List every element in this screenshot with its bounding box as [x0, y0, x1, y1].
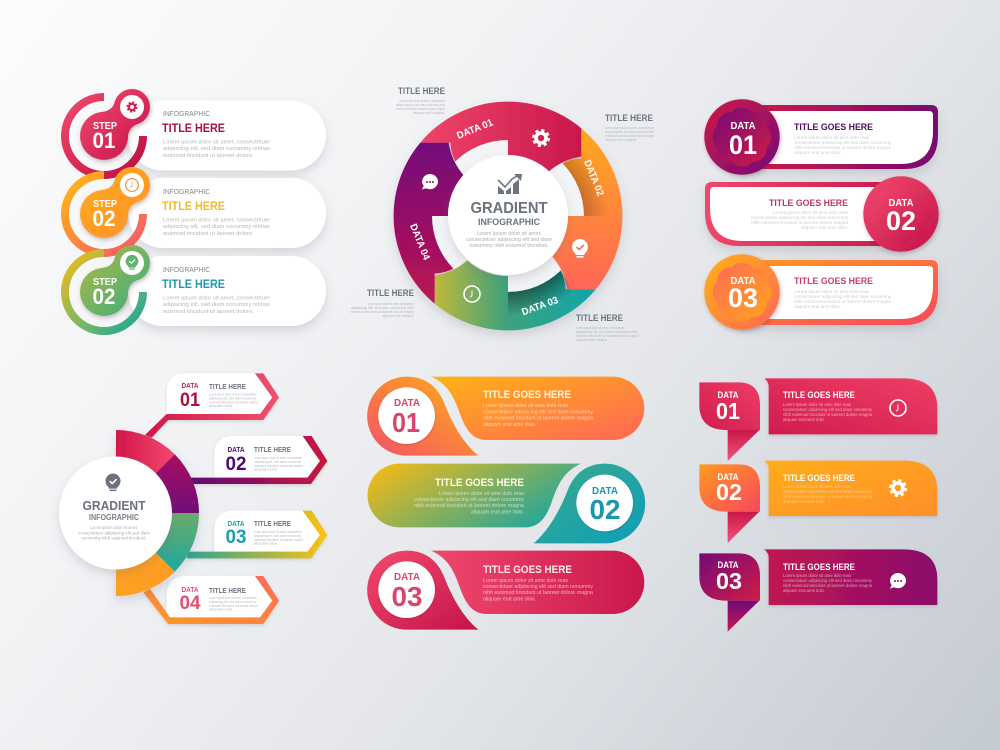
banner 2 text: nibh euismod tincidunt ut laoreet dolore magna	[414, 503, 525, 509]
banner 3 text: TITLE GOES HERE	[483, 564, 572, 576]
banner 2 teardrop	[534, 464, 645, 543]
segment labels: DATA 01	[455, 117, 495, 142]
callout top right: Lorem ipsum dolor sit amet, consectetuer	[605, 126, 655, 130]
step 2 row	[65, 167, 326, 253]
card 1 text: consectetuer adipiscing elit sed diam nonummy	[783, 407, 873, 412]
card 2	[764, 461, 937, 516]
card 2 text: euismod tincidunt ut laoreet dolore	[254, 464, 303, 468]
callout bottom right: aliquam erat volutpat.	[576, 338, 608, 342]
text 1: consectetuer adipiscing elit sed diam nonummy	[794, 140, 892, 145]
inner white 2	[710, 187, 900, 241]
card 3	[764, 549, 937, 605]
card 4 text: 04	[180, 593, 201, 614]
callout top left: Lorem ipsum dolor sit amet, consectetuer	[399, 99, 446, 103]
banner 3 text: Lorem ipsum dolor sit ame dolo reas	[483, 578, 568, 584]
card 3 text: aliquam erat.	[254, 542, 278, 546]
flower 3	[713, 263, 771, 321]
callout bottom left: aliquam erat volutpat.	[382, 314, 414, 318]
donut segments	[394, 102, 622, 330]
step 2 text: euismod tincidunt ut laoreet dolore.	[163, 231, 254, 237]
callout bottom right	[576, 313, 639, 342]
icon: chat	[890, 573, 906, 589]
ring 2	[65, 175, 143, 253]
centre heading	[466, 200, 552, 249]
frame 1	[740, 105, 938, 169]
card 1 text: aliquam erat.	[209, 404, 233, 408]
card 2 text: aliquam erat.	[254, 468, 278, 472]
white pill 1	[128, 100, 326, 170]
banner 2 text: Lorem ipsum dolor sit ame dolo reas	[439, 491, 524, 497]
label 2: DATA	[888, 198, 914, 209]
card 3 text: 03	[226, 527, 246, 548]
flower 1	[713, 108, 771, 166]
centre heading: INFOGRAPHIC	[478, 217, 540, 228]
callout top left: aliquam erat volutpat.	[413, 111, 445, 115]
icon: clock	[120, 173, 144, 197]
step 2 label: STEP	[93, 199, 117, 210]
card 3 text: DATA	[228, 521, 244, 528]
callout top right: aliquam erat volutpat.	[605, 138, 637, 142]
tag 3 number: DATA	[718, 560, 739, 570]
inner white 3	[740, 266, 933, 319]
centre white disc	[448, 155, 568, 275]
segment labels	[407, 117, 606, 318]
segment labels: DATA 02	[581, 158, 606, 198]
card 1 text: aliquam erat ame dolo.	[783, 417, 825, 422]
banner 2 number: DATA	[592, 486, 618, 497]
icon: clock	[464, 286, 480, 302]
step 3 text: INFOGRAPHIC	[163, 267, 210, 274]
card 3 text: consectetuer adipiscing elit sed diam nonummy	[783, 578, 873, 583]
card 3 text: nibh euismod tincidunt ut laoreet dolore magna	[783, 583, 872, 588]
banner 3 teardrop	[367, 551, 478, 630]
tag 2 number: 02	[716, 479, 742, 505]
banner 1 disc	[378, 387, 435, 444]
card 4 text: aliquam erat.	[209, 608, 233, 612]
card 4 text	[180, 587, 258, 614]
tag 3	[699, 553, 760, 632]
half ring wedges	[116, 430, 199, 596]
callout top left: TITLE HERE	[398, 86, 445, 96]
label 3: DATA	[730, 276, 756, 287]
callout top left: adipiscing elit, sed diam nonummy nibh	[396, 103, 445, 107]
card 3 text: euismod tincidunt ut laoreet dolore	[254, 538, 303, 542]
step 3 text: euismod tincidunt ut laoreet dolore.	[163, 309, 254, 315]
disc 1	[704, 99, 780, 175]
card 3 text: TITLE GOES HERE	[783, 562, 855, 572]
callout bottom right: TITLE HERE	[576, 313, 623, 323]
banner 1 teardrop	[367, 377, 478, 456]
callout bottom left: TITLE HERE	[367, 288, 414, 298]
frame 3	[740, 260, 938, 325]
banner 1 text	[483, 389, 594, 428]
step 3 label: 02	[92, 284, 116, 309]
text 3	[794, 276, 892, 309]
card 2 text	[783, 473, 873, 504]
card 2 text: Lorem ipsum dolor sit ame dolo reas	[783, 484, 852, 489]
banner 1 text: TITLE GOES HERE	[483, 389, 571, 401]
centre heading: nonummy nibh euismod tincidunt.	[470, 243, 548, 249]
text 2: TITLE GOES HERE	[769, 198, 848, 209]
card 1 text: nibh euismod tincidunt ut laoreet dolore magna	[783, 412, 872, 417]
centre text: INFOGRAPHIC	[89, 513, 139, 522]
card 1 text: adipiscing elit, sed diam nonummy	[209, 396, 256, 400]
banner 1 text: aliquam erat ame dolo.	[483, 422, 536, 428]
callout bottom left: euismod tincidunt ut laoreet dolore magna	[351, 310, 414, 314]
text 2	[751, 198, 849, 230]
banner 2 number: 02	[590, 494, 620, 525]
frame 2	[705, 182, 900, 246]
step 1 text: INFOGRAPHIC	[163, 111, 210, 118]
card 1 text: euismod tincidunt ut laoreet dolore	[209, 400, 258, 404]
step 1 text: adipiscing elit, sed diam nonummy nibhas	[163, 146, 270, 152]
disc 2	[863, 176, 939, 252]
blob 3	[80, 245, 150, 316]
centre heading: GRADIENT	[470, 200, 548, 217]
banner 2 text: aliquam erat ame dolo.	[471, 510, 524, 516]
icon: chat	[422, 174, 438, 190]
banner 2 disc	[576, 475, 633, 531]
card 1	[764, 378, 937, 434]
white pill 2	[128, 178, 326, 248]
card 3 text	[783, 562, 873, 593]
icon: clock	[890, 400, 906, 416]
text 2: aliquam erat ame dolo.	[801, 225, 848, 230]
panel: radial arrows	[59, 373, 327, 624]
segment labels: DATA 04	[407, 222, 432, 262]
tag 3 number: 03	[716, 568, 742, 594]
centre heading: consectetuer adipiscing elit sed diam	[466, 237, 552, 243]
callout bottom right: euismod tincidunt ut laoreet dolore magna	[576, 334, 639, 338]
card 4 text: Lorem ipsum dolor sit amet, consectetuer	[209, 596, 258, 600]
icon: bulb	[572, 239, 588, 258]
banner 1 text: consectetuer adipiscing elit sed diam nonummy	[483, 410, 593, 416]
card 4 text: euismod tincidunt ut laoreet dolore	[209, 604, 258, 608]
banner 2 text: TITLE GOES HERE	[435, 477, 524, 489]
step 1 text: TITLE HERE	[162, 121, 225, 135]
banner 3 number: DATA	[394, 572, 420, 583]
label 3: 03	[728, 283, 758, 313]
banner 3 disc	[378, 561, 435, 618]
card 2 text	[226, 447, 303, 475]
card 1 text: TITLE GOES HERE	[783, 390, 855, 400]
card 3 text: adipiscing elit, sed diam nonummy	[254, 534, 301, 538]
card 1 text: Lorem ipsum dolor sit ame dolo reas	[783, 402, 852, 407]
step 3 row	[65, 245, 326, 331]
card 2 text: consectetuer adipiscing elit sed diam nonummy	[783, 489, 873, 494]
card 3 text: TITLE HERE	[254, 521, 291, 528]
step 3 text: adipiscing elit, sed diam nonummy nibhas	[163, 302, 270, 308]
step 3 text: TITLE HERE	[162, 277, 225, 291]
callout bottom left: Lorem ipsum dolor sit amet, consectetuer	[368, 302, 415, 306]
text 2: consectetuer adipiscing elit sed diam nonummy	[751, 215, 849, 220]
step 1 text	[162, 111, 270, 159]
card 3 text: aliquam erat ame dolo.	[783, 588, 825, 593]
flower 2	[872, 185, 930, 243]
card 4 text: DATA	[182, 587, 198, 594]
badge card 3	[704, 254, 938, 330]
callout bottom right: adipiscing elit, sed diam nonummy nibh	[576, 330, 638, 334]
arrow cards	[143, 373, 327, 624]
centre text: nonummy nibh euismod tincidunt.	[82, 536, 146, 542]
callout top right	[605, 113, 655, 142]
icon: gear	[890, 480, 906, 496]
text 2: nibh euismod tincidunt ut laoreet dolore magna	[751, 220, 848, 225]
blob 1	[80, 89, 150, 160]
text 3: TITLE GOES HERE	[794, 276, 873, 287]
card 1 text	[180, 383, 258, 411]
panel: data badges	[704, 99, 939, 330]
card 2 text: aliquam erat ame dolo.	[783, 499, 825, 504]
callout bottom left	[351, 288, 415, 318]
banner 1 number: DATA	[394, 398, 420, 409]
banner 2 pill	[368, 464, 581, 527]
panel: teardrop banners	[367, 377, 645, 630]
card 3 text: Lorem ipsum dolor sit amet, consectetuer	[254, 530, 303, 534]
text 1: nibh euismod tincidunt ut laoreet dolore magna	[794, 145, 891, 150]
step 2 text: INFOGRAPHIC	[163, 189, 210, 196]
step 2 text: TITLE HERE	[162, 199, 225, 213]
card 3 text: Lorem ipsum dolor sit ame dolo reas	[783, 573, 852, 578]
callout top left: euismod tincidunt ut laoreet dolore magna	[396, 107, 445, 111]
banner 1 text: Lorem ipsum dolor sit ame dolo reas	[483, 403, 568, 409]
segment labels: DATA 03	[520, 295, 560, 318]
step 3 text: Lorem ipsum dolor sit amet, consectetuer	[163, 296, 270, 302]
panel: step cards	[65, 89, 326, 331]
icon: gear	[534, 130, 548, 146]
icon: growth chart	[498, 174, 522, 194]
card 2 text: TITLE GOES HERE	[783, 473, 855, 483]
ring 1	[65, 97, 143, 175]
centre heading: Lorem ipsum dolor sit amet,	[476, 231, 542, 237]
text 3: consectetuer adipiscing elit sed diam nonummy	[794, 294, 892, 299]
card 2 text: adipiscing elit, sed diam nonummy	[254, 460, 301, 464]
card 4 text: adipiscing elit, sed diam nonummy	[209, 600, 256, 604]
card 4 text: TITLE HERE	[209, 588, 246, 595]
callout bottom left: adipiscing elit, sed diam nonummy nibh	[351, 306, 414, 310]
banner 1 number: 01	[392, 407, 420, 438]
banner 3 number: 03	[392, 581, 422, 612]
step 2 text: Lorem ipsum dolor sit amet, consectetuer	[163, 218, 270, 224]
panel: cycle donut	[351, 86, 655, 342]
centre text: GRADIENT	[82, 498, 146, 513]
inner white 1	[740, 111, 933, 164]
card 1 text: Lorem ipsum dolor sit amet, consectetuer	[209, 392, 258, 396]
tag 1 number: DATA	[718, 390, 739, 400]
centre text: consectetuer adipiscing elit sed diam	[78, 530, 150, 536]
card 1 text	[783, 390, 873, 422]
icon: bulb	[105, 473, 121, 491]
card 1 text: 01	[180, 390, 200, 411]
banner 3 pill	[431, 551, 644, 614]
text 3: aliquam erat ame dolo.	[794, 304, 841, 309]
card 2 shape	[190, 436, 327, 484]
step 1 label: STEP	[93, 121, 117, 132]
disc 3	[704, 254, 780, 330]
tag 2	[699, 464, 760, 543]
step 1 label: 01	[92, 128, 116, 153]
ring 3	[65, 253, 143, 331]
step 1 text: euismod tincidunt ut laoreet dolore.	[163, 153, 254, 159]
card 2 text: Lorem ipsum dolor sit amet, consectetuer	[254, 456, 303, 460]
step 3 label: STEP	[93, 277, 117, 288]
banner 1 pill	[431, 377, 644, 440]
text 3: Lorem ipsum dolor sit ame dolo reas	[794, 289, 870, 294]
card 1 text: TITLE HERE	[209, 384, 246, 391]
text 1: TITLE GOES HERE	[794, 122, 873, 133]
step 2 label: 02	[92, 206, 116, 231]
banner 3 text: aliquam erat ame dolo.	[483, 596, 536, 602]
white pill 3	[128, 256, 326, 326]
card 2 text: DATA	[228, 447, 244, 454]
card 2 text: 02	[226, 454, 246, 475]
callout top right: adipiscing elit, sed diam nonummy nibh	[605, 130, 654, 134]
text 1: aliquam erat ame dolo.	[794, 150, 841, 155]
callout top right: TITLE HERE	[605, 113, 653, 123]
tag 1	[699, 382, 760, 461]
badge card 2	[705, 176, 939, 252]
icon: bulb	[120, 251, 144, 275]
card 2 text: nibh euismod tincidunt ut laoreet dolore magna	[783, 494, 872, 499]
callout bottom right: Lorem ipsum dolor sit amet, consectetuer	[576, 326, 625, 330]
callout top left	[396, 86, 446, 115]
callout top right: euismod tincidunt ut laoreet dolore magna	[605, 134, 654, 138]
card 4 shape	[143, 576, 279, 624]
centre circle	[59, 456, 172, 570]
banner 2 text: consectetuer adipiscing elit sed diam nonummy	[414, 497, 524, 503]
text 2: Lorem ipsum dolor sit ame dolo reas	[773, 210, 849, 215]
icon: gear	[120, 95, 144, 119]
step 2 text: adipiscing elit, sed diam nonummy nibhas	[163, 224, 270, 230]
card 1 text: DATA	[182, 383, 198, 390]
label 1: DATA	[730, 121, 756, 132]
step 3 text	[162, 267, 270, 315]
banner 1 text: nibh euismod tincidunt ut laoreet dolore magna	[483, 416, 594, 422]
banner 3 text: consectetuer adipiscing elit sed diam nonummy	[483, 584, 593, 590]
blob 2	[80, 167, 150, 238]
text 1	[794, 122, 892, 155]
step 2 text	[162, 189, 270, 237]
tag 1 number: 01	[716, 398, 740, 424]
card 3 text	[226, 521, 303, 548]
panel: pointer tags	[699, 378, 937, 632]
label 2: 02	[886, 206, 916, 236]
centre text	[78, 498, 150, 542]
card 1 shape	[145, 373, 279, 438]
label 1: 01	[729, 130, 757, 160]
banner shapes	[367, 377, 645, 630]
banner 3 text	[483, 564, 594, 602]
card 3 shape	[187, 511, 327, 558]
badge card 1	[704, 99, 938, 175]
text 3: nibh euismod tincidunt ut laoreet dolore magna	[794, 299, 891, 304]
banner 3 text: nibh euismod tincidunt ut laoreet dolore magna	[483, 590, 594, 596]
text 1: Lorem ipsum dolor sit ame dolo reas	[794, 135, 870, 140]
tag shapes	[699, 378, 937, 632]
card 2 text: TITLE HERE	[254, 447, 291, 454]
centre text: Lorem ipsum dolor sit amet,	[90, 525, 138, 531]
tag 2 number: DATA	[718, 472, 739, 482]
step 1 row	[65, 89, 326, 175]
step 1 text: Lorem ipsum dolor sit amet, consectetuer	[163, 140, 270, 146]
banner 2 text	[414, 477, 525, 516]
